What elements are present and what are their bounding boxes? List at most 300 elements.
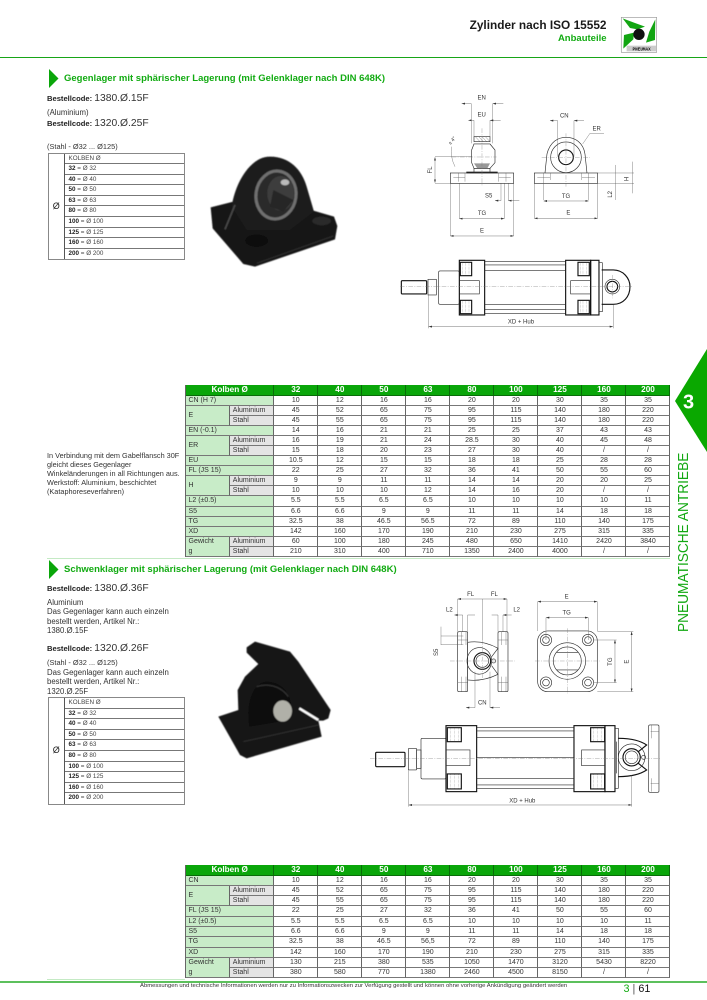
side view left: TG [478, 211, 486, 217]
dimension table 2: 9 [382, 928, 386, 935]
dimension table 1: 43 [600, 427, 608, 434]
material note: (Aluminium) [47, 108, 89, 117]
dimension table 2: 315 [598, 949, 610, 956]
dimension table 1: 32.5 [289, 518, 303, 525]
dimension table 1: Aluminium [233, 538, 265, 545]
dimension table 2: 230 [510, 949, 522, 956]
dimension table 1: 23 [424, 447, 432, 454]
dimension table 1: 170 [378, 528, 390, 535]
piston key table 2: Ø [53, 745, 60, 755]
dimension table 1: Kolben Ø [211, 385, 248, 394]
dimension table 1: 220 [642, 407, 654, 414]
flange view: TG [562, 611, 571, 617]
dimension table 1 [185, 385, 670, 557]
dimension table 1: 28.5 [465, 437, 479, 444]
dimension table 1: 32 [291, 385, 300, 394]
dimension table 2: Kolben Ø [211, 864, 248, 874]
dimension table 2: 6.6 [291, 928, 301, 935]
piston key table 1: 50 = Ø 50 [68, 186, 96, 193]
dimension table 2: 10 [468, 918, 476, 925]
dimension table 1: 14 [468, 487, 476, 494]
dimension table 2: 140 [598, 938, 610, 945]
dimension table 2: 5430 [596, 959, 612, 966]
dimension table 1: 10 [468, 497, 476, 504]
dimension table 1: 16 [512, 487, 520, 494]
piston key table 1: 100 = Ø 100 [68, 218, 103, 225]
dimension table 1: 16 [380, 397, 388, 404]
dimension table 2: g [188, 969, 192, 976]
dimension table 2: 3120 [552, 959, 568, 966]
dimension table 1: 115 [510, 417, 522, 424]
dimension table 2: 75 [424, 887, 432, 894]
dimension table 1: 14 [292, 427, 300, 434]
dimension table 1: 24 [424, 437, 432, 444]
dimension table 1: 315 [598, 528, 610, 535]
dimension table 1: 30 [512, 447, 520, 454]
dimension table 2: 110 [554, 938, 566, 945]
piston key table 1: 125 = Ø 125 [68, 229, 103, 236]
dimension table 1: 5.5 [291, 497, 301, 504]
dimension table 1: 16 [424, 397, 432, 404]
aluminium note: Aluminium [47, 598, 83, 606]
dimension table 1: 36 [468, 467, 476, 474]
dimension table 1: 21 [380, 427, 388, 434]
dimension table 1: 89 [512, 518, 520, 525]
dimension table 1: 180 [598, 407, 610, 414]
logo: Pneumax [621, 17, 657, 53]
flange view: TG [608, 657, 614, 666]
dimension table 1: 20 [468, 397, 476, 404]
front view right: H [625, 177, 631, 181]
steel range note: (Stahl - Ø32 ... Ø125) [47, 142, 118, 151]
dimension table 1: Stahl [233, 447, 249, 454]
description text: (Kataphoreseverfahren) [47, 487, 124, 496]
dimension table 2: 55 [600, 907, 608, 914]
dimension table 1: 6.5 [379, 497, 389, 504]
dimension table 1: 650 [510, 538, 522, 545]
dimension table 2: 10 [292, 876, 300, 884]
dimension table 2: 36 [468, 907, 476, 914]
dimension table 2: 45 [292, 897, 300, 904]
dimension table 1: 55 [600, 467, 608, 474]
dimension table 1: 63 [423, 385, 432, 394]
dimension table 1: 25 [556, 457, 564, 464]
dimension table 2: 5.5 [291, 918, 301, 925]
dimension table 2: 200 [641, 864, 655, 874]
dimension table 2: 11 [644, 918, 652, 925]
piston key table 1: 160 = Ø 160 [68, 239, 103, 246]
dimension table 1: 220 [642, 417, 654, 424]
piston key table 1: Ø [53, 200, 60, 210]
dimension table 2: CN [188, 876, 199, 884]
description text: gleicht dieses Gegenlager [47, 460, 131, 469]
dimension table 2: 18 [644, 928, 652, 935]
cylinder 2: XD + Hub [509, 799, 536, 805]
dimension table 1: 245 [422, 538, 434, 545]
dimension table 1: 160 [597, 385, 611, 394]
dimension table 1: Aluminium [233, 407, 265, 414]
dimension table 2: 10 [512, 918, 520, 925]
dimension table 2: 50 [556, 907, 564, 914]
piston key table 1: KOLBEN Ø [68, 154, 101, 162]
dimension table 2: Aluminium [233, 887, 265, 894]
dimension table 1: 180 [378, 538, 390, 545]
dimension table 1: 14 [512, 477, 520, 484]
dimension table 2: 12 [336, 876, 344, 884]
piston key table 1: 80 = Ø 80 [68, 207, 96, 214]
dimension table 2: 10 [556, 918, 564, 925]
dimension table 2: 60 [644, 907, 652, 914]
dimension table 1: 60 [644, 467, 652, 474]
dimension table 1: 10 [292, 487, 300, 494]
dimension table 1: 50 [379, 385, 388, 394]
cylinder 1 [400, 260, 633, 328]
front view right: L2 [608, 190, 614, 198]
dimension table 2: 2460 [464, 969, 480, 976]
dimension table 2: TG [188, 938, 198, 945]
dimension table 1: 140 [598, 518, 610, 525]
dimension table 1: 1410 [552, 538, 568, 545]
dimension table 1: g [188, 548, 192, 555]
dimension table 1: 710 [422, 548, 434, 555]
dimension table 1: 140 [554, 417, 566, 424]
section arrow 2 [49, 560, 58, 579]
dimension table 1: 27 [380, 467, 388, 474]
dimension table 2: FL (JS 15) [188, 907, 221, 914]
side view: S5 [434, 648, 440, 656]
dimension table 1: 18 [512, 457, 520, 464]
dimension table 2: 40 [335, 864, 344, 874]
dimension table 1: 19 [336, 437, 344, 444]
dimension table 1: 115 [510, 407, 522, 414]
side view left: ± 4° [447, 136, 458, 146]
dimension table 2: 20 [512, 876, 520, 884]
logo: Pneumax: PNEUMAX [633, 47, 651, 52]
dimension table 2: 56,5 [421, 938, 435, 945]
dimension table 1: L2 (±0.5) [188, 497, 216, 504]
dimension table 1: 10 [292, 397, 300, 404]
side view left: E [480, 228, 484, 234]
dimension table 1: EU [188, 457, 198, 464]
dimension table 1: 100 [334, 538, 346, 545]
side view left: S5 [485, 194, 493, 200]
dimension table 2: 22 [292, 907, 300, 914]
dimension table 2: 380 [378, 959, 390, 966]
side view: L2 [513, 608, 521, 614]
flange view: E [625, 660, 631, 664]
dimension table 1: 16 [292, 437, 300, 444]
dimension table 2: 32 [424, 907, 432, 914]
dimension table 1: Stahl [233, 417, 249, 424]
order code aluminium: Bestellcode: 1380.Ø.15F [47, 93, 149, 104]
dimension table 2: XD [188, 949, 198, 956]
dimension table 1: 18 [644, 508, 652, 515]
dimension table 2: 220 [642, 887, 654, 894]
cylinder 2 [370, 725, 660, 807]
dimension table 1: / [647, 487, 649, 494]
dimension table 2: 8220 [640, 959, 656, 966]
dimension table 1: 210 [290, 548, 302, 555]
dimension table 2: 115 [510, 897, 522, 904]
piston key table 2: 40 = Ø 40 [68, 720, 96, 727]
side view left: EU [477, 113, 486, 119]
dimension table 2: 95 [468, 897, 476, 904]
dimension table 1: 200 [641, 385, 655, 394]
dimension table 1: 25 [468, 427, 476, 434]
front view right: ER [592, 127, 601, 133]
dimension table 1: 15 [380, 457, 388, 464]
piston key table 1: 32 = Ø 32 [68, 165, 96, 172]
dimension table 1: 40 [556, 437, 564, 444]
dimension table 1: 20 [600, 477, 608, 484]
dimension table 1: ER [188, 442, 198, 449]
steel note: bestellt werden, Artikel Nr.: [47, 677, 139, 686]
dimension table 1: 95 [468, 417, 476, 424]
dimension table 1: 11 [644, 497, 652, 504]
dimension table 2: / [603, 969, 605, 976]
flange view: E [565, 595, 569, 601]
footer disclaimer: Abmessungen und technische Informationen werden nur zu Informationszwecken zur Verfügung gestellt und können ohne vorherige Ankündigung geändert werden [140, 983, 567, 989]
dimension table 2: 16 [380, 876, 388, 884]
dimension table 1: 38 [336, 518, 344, 525]
dimension table 2: 220 [642, 897, 654, 904]
dimension table 1: 3840 [640, 538, 656, 545]
footer rule [0, 980, 707, 982]
dimension table 2: 18 [600, 928, 608, 935]
dimension table 2: 4500 [508, 969, 524, 976]
dimension table 2: 175 [642, 938, 654, 945]
piston key table 2: 125 = Ø 125 [68, 773, 103, 780]
dimension table 1: 11 [468, 508, 476, 515]
dimension table 2: Aluminium [233, 959, 265, 966]
dimension table 2: 6.5 [379, 918, 389, 925]
dimension table 1: 48 [644, 437, 652, 444]
dimension table 1: 25 [336, 467, 344, 474]
side view: FL [467, 592, 475, 598]
section separator [47, 558, 670, 559]
dimension table 2: 125 [553, 864, 567, 874]
dimension table 2: 11 [468, 928, 476, 935]
dimension table 2: 8150 [552, 969, 568, 976]
dimension table 2: Stahl [233, 897, 249, 904]
dimension table 2: 210 [466, 949, 478, 956]
dimension table 2: 38 [336, 938, 344, 945]
dimension table 1: 50 [556, 467, 564, 474]
piston key table 2: 160 = Ø 160 [68, 784, 103, 791]
dimension table 2: 1050 [464, 959, 480, 966]
dimension table 1: 18 [468, 457, 476, 464]
dimension table 1: 56.5 [421, 518, 435, 525]
dimension table 2: 35 [644, 876, 652, 884]
dimension table 1: S5 [188, 508, 197, 515]
dimension table 1: 22 [292, 467, 300, 474]
dimension table 1: 335 [642, 528, 654, 535]
page number: 3 | 61 [624, 982, 650, 994]
dimension table 1: 190 [422, 528, 434, 535]
dimension table 2: 30 [556, 876, 564, 884]
dimension table 1: 25 [512, 427, 520, 434]
side view left: FL [428, 166, 434, 173]
section tab: chapter 3: 3 [683, 392, 694, 414]
dimension table 1: Stahl [233, 487, 249, 494]
dimension table 2: Gewicht [188, 959, 214, 966]
dimension table 2: E [188, 892, 193, 899]
dimension table 2: 80 [467, 864, 476, 874]
piston key table 1: 200 = Ø 200 [68, 250, 103, 257]
dimension table 2: 140 [554, 897, 566, 904]
dimension table 2: 20 [468, 876, 476, 884]
dimension table 2: 65 [380, 897, 388, 904]
dimension table 1: 125 [553, 385, 567, 394]
cylinder 1: XD + Hub [508, 320, 535, 326]
dimension table 1: 20 [512, 397, 520, 404]
dimension table 1: 37 [556, 427, 564, 434]
dimension table 2 [185, 864, 670, 978]
footer accent line [47, 978, 185, 980]
side view: L2 [446, 608, 453, 614]
side view left [428, 96, 519, 236]
dimension table 1: / [603, 487, 605, 494]
dimension table 1: H [188, 482, 194, 489]
dimension table 2: 335 [642, 949, 654, 956]
dimension table 1: 14 [556, 508, 564, 515]
steel note [47, 658, 169, 696]
dimension table 1: 20 [380, 447, 388, 454]
dimension table 2: 72 [468, 938, 476, 945]
dimension table 1: / [603, 548, 605, 555]
order code steel 2: Bestellcode: 1320.Ø.26F [47, 643, 149, 654]
description text: In Verbindung mit dem Gabelflansch 30F [47, 451, 179, 460]
dimension table 2: 45 [292, 887, 300, 894]
dimension table 1: 20 [556, 477, 564, 484]
subtitle: Anbauteile [558, 32, 606, 44]
description text: Winkeländerungen in all Richtungen aus. [47, 469, 180, 478]
dimension table 2: 215 [334, 959, 346, 966]
order code aluminium 2: Bestellcode: 1380.Ø.36F [47, 583, 149, 594]
piston key table 2: 63 = Ø 63 [68, 741, 96, 748]
dimension table 2: 27 [380, 907, 388, 914]
dimension table 1: 18 [336, 447, 344, 454]
description text: Werkstoff: Aluminium, beschichtet [47, 478, 156, 487]
piston key table 2 [48, 697, 184, 805]
dimension table 2: 95 [468, 887, 476, 894]
header rule [0, 57, 707, 58]
order code steel: Bestellcode: 1320.Ø.25F [47, 118, 149, 129]
dimension table 1: 45 [600, 437, 608, 444]
steel note: 1320.Ø.25F [47, 686, 88, 696]
dimension table 2: 63 [423, 864, 432, 874]
dimension table 2: 580 [334, 969, 346, 976]
dimension table 1: 11 [380, 477, 387, 484]
dimension table 2: 32 [291, 864, 300, 874]
dimension table 1: 15 [292, 447, 300, 454]
dimension table 1: 10 [600, 497, 608, 504]
dimension table 1: 32 [424, 467, 432, 474]
steel note: Das Gegenlager kann auch einzeln [47, 668, 169, 676]
dimension table 2: 35 [600, 876, 608, 884]
dimension table 1: 12 [336, 457, 344, 464]
dimension table 2: 50 [379, 864, 388, 874]
dimension table 1: 10 [336, 487, 344, 494]
dimension table 1: TG [188, 518, 198, 525]
dimension table 1: 180 [598, 417, 610, 424]
dimension table 2: 1470 [508, 959, 524, 966]
dimension table 1: / [647, 447, 649, 454]
dimension table 1: 1350 [464, 548, 480, 555]
dimension table 1: 30 [556, 397, 564, 404]
dimension table 1: 40 [335, 385, 344, 394]
dimension table 1: 9 [294, 477, 298, 484]
dimension table 2: 100 [509, 864, 523, 874]
dimension table 1: 6.6 [291, 508, 301, 515]
dimension table 2: 41 [512, 907, 520, 914]
dimension table 2: 115 [510, 887, 522, 894]
piston key table 1: 63 = Ø 63 [68, 197, 96, 204]
dimension table 1: 9 [426, 508, 430, 515]
dimension table 1: 310 [334, 548, 346, 555]
dimension table 1: 65 [380, 407, 388, 414]
side view: CN [478, 701, 487, 707]
dimension table 1: 60 [292, 538, 300, 545]
front view right: TG [562, 194, 570, 200]
dimension table 1: CN (H 7) [188, 397, 216, 404]
dimension table 1: 75 [424, 407, 432, 414]
dimension table 2: 52 [336, 887, 344, 894]
dimension table 1: 65 [380, 417, 388, 424]
dimension table 1: 6.6 [335, 508, 345, 515]
dimension table 2: 190 [422, 949, 434, 956]
dimension table 1: / [603, 447, 605, 454]
dimension table 1: 21 [380, 437, 388, 444]
dimension table 2: 130 [290, 959, 302, 966]
dimension table 1: FL (JS 15) [188, 467, 221, 474]
aluminium note: bestellt werden, Artikel Nr.: [47, 616, 139, 626]
dimension table 2: 10 [600, 918, 608, 925]
dimension table 1: / [647, 548, 649, 555]
dimension table 1: 10 [556, 497, 564, 504]
side view: FL [491, 592, 498, 598]
aluminium note: 1380.Ø.15F [47, 626, 88, 635]
dimension table 2: 180 [598, 897, 610, 904]
dimension table 1: E [188, 412, 193, 419]
dimension table 1: 45 [292, 407, 300, 414]
vertical chapter label: PNEUMATISCHE ANTRIEBE [674, 452, 692, 632]
dimension table 1: 20 [556, 487, 564, 494]
dimension table 1: 35 [600, 397, 608, 404]
dimension table 1: 9 [382, 508, 386, 515]
dimension table 2: 65 [380, 887, 388, 894]
dimension table 1: 400 [378, 548, 390, 555]
side view [434, 592, 521, 708]
dimension table 1: 75 [424, 417, 432, 424]
flange view [535, 595, 633, 693]
dimension table 1: 25 [644, 477, 652, 484]
dimension table 1: 142 [290, 528, 302, 535]
dimension table 1: 80 [467, 385, 476, 394]
dimension table 2: 1380 [420, 969, 436, 976]
piston key table 1: 40 = Ø 40 [68, 176, 96, 183]
dimension table 1: 11 [512, 508, 520, 515]
dimension table 1: 12 [336, 397, 344, 404]
dimension table 1: 9 [338, 477, 342, 484]
dimension table 2: 25 [336, 907, 344, 914]
dimension table 1: 11 [424, 477, 432, 484]
dimension table 1: 46.5 [377, 518, 391, 525]
dimension table 2: / [647, 969, 649, 976]
dimension table 2: 535 [422, 959, 434, 966]
dimension table 2: 11 [512, 928, 520, 935]
dimension table 2: 32.5 [289, 938, 303, 945]
